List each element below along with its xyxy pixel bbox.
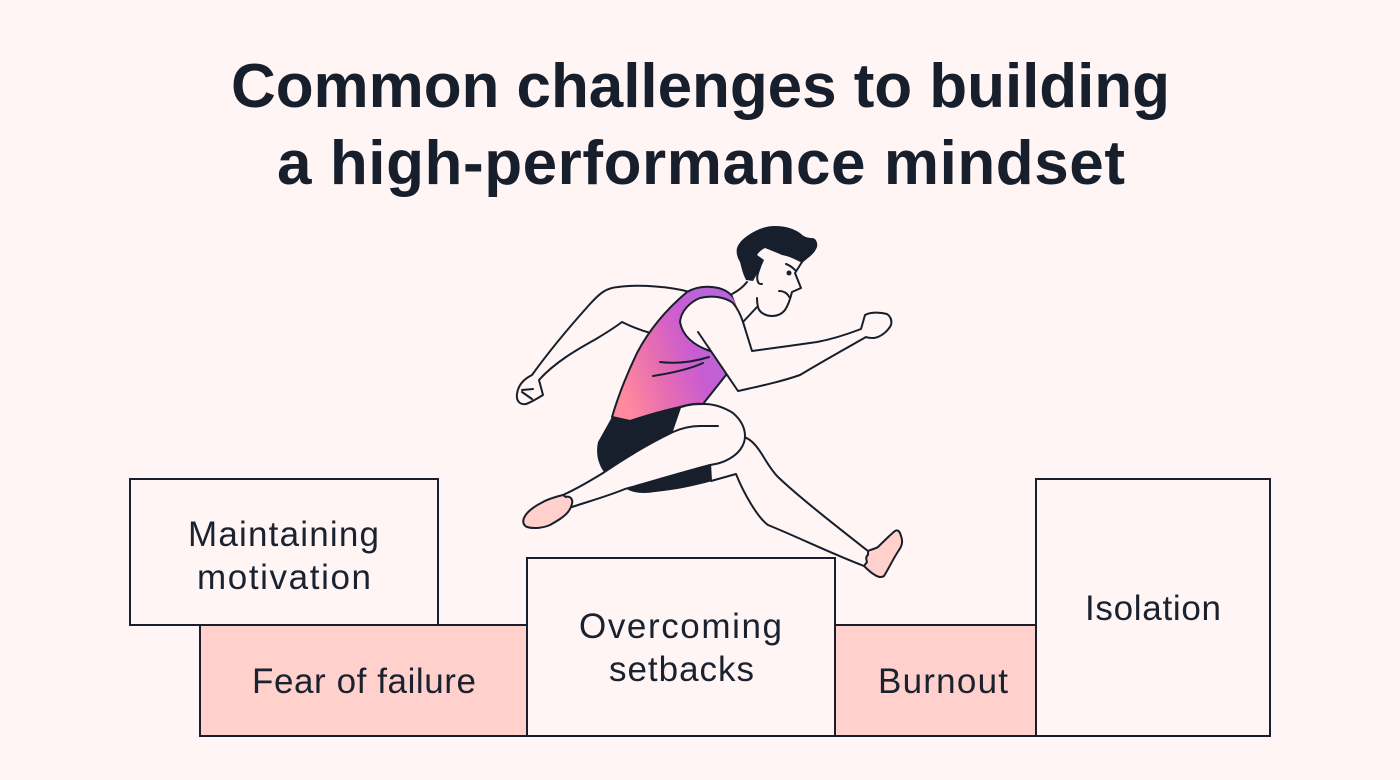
hurdle: Overcoming setbacks: Overcoming (579, 607, 782, 646)
vest folds (653, 357, 709, 376)
hurdle: Maintaining motivation: motivation (197, 558, 371, 597)
vest (612, 287, 743, 421)
hurdle: Maintaining motivation (130, 479, 438, 625)
head (748, 245, 806, 316)
title: a high-performance mindset (277, 129, 1125, 198)
hurdle: Isolation (1036, 479, 1270, 736)
title: Common challenges to building (231, 52, 1170, 121)
leading foot (523, 495, 572, 528)
trailing leg and foot (705, 437, 902, 577)
hurdle: Fear of failure (200, 625, 527, 736)
facial features (757, 264, 795, 297)
neck (732, 282, 760, 323)
hurdle: Isolation: Isolation (1085, 589, 1221, 628)
hurdle: Overcoming setbacks: setbacks (609, 650, 754, 689)
rear arm (517, 286, 690, 404)
title (231, 52, 1170, 198)
shorts (597, 405, 712, 493)
hurdle: Burnout: Burnout (878, 662, 1008, 701)
runner illustration (517, 226, 902, 577)
front arm (680, 297, 891, 391)
hurdle: Maintaining motivation: Maintaining (188, 515, 379, 554)
hurdle: Fear of failure: Fear of failure (252, 662, 476, 701)
hair (737, 226, 817, 281)
rear arm fingers (522, 389, 533, 399)
leading leg (563, 404, 745, 507)
hurdle: Burnout (835, 625, 1036, 736)
hurdle: Overcoming setbacks (527, 558, 835, 736)
